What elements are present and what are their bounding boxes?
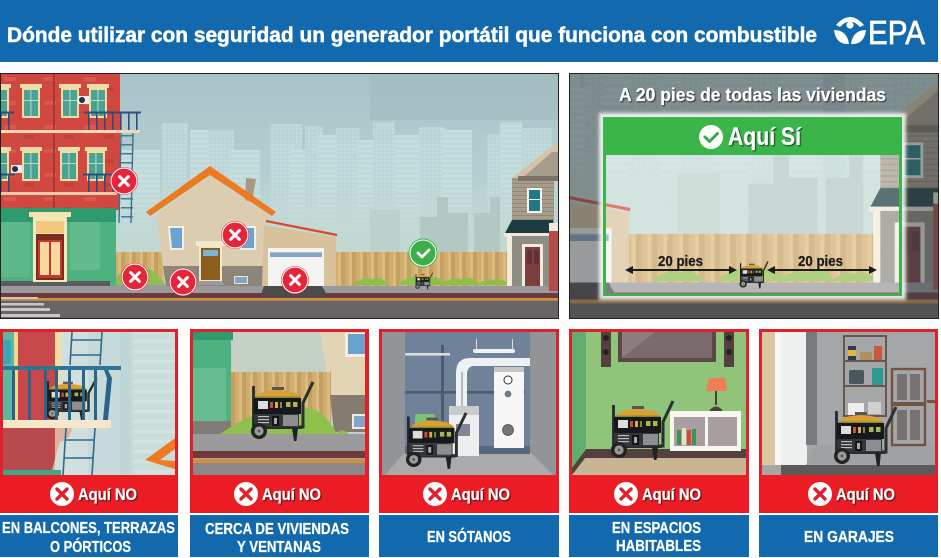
- caption: O PÓRTICOS: [50, 538, 131, 556]
- badge: garage not allowed: [281, 266, 309, 294]
- generator: [834, 407, 896, 466]
- caption: EN BALCONES, TERRAZAS: [2, 520, 175, 537]
- caption: [759, 515, 938, 557]
- clean view inside the frame: [606, 155, 899, 294]
- EPA logo: [834, 14, 925, 51]
- title: Dónde utilizar con seguridad un generador portátil que funciona con combustible: [7, 24, 817, 47]
- verdict bar: Aquí NO: [836, 485, 895, 504]
- generator: [406, 413, 466, 469]
- icon: check: [699, 125, 723, 149]
- verdict bar: Aquí NO: [451, 485, 510, 504]
- label right distance: 20 pies: [798, 254, 843, 270]
- caption: [379, 515, 559, 557]
- generator on balcony: [46, 378, 97, 421]
- caption: Y VENTANAS: [237, 539, 321, 556]
- badge: balcony not allowed: [110, 167, 138, 195]
- badge: near window not allowed: [221, 221, 249, 249]
- caption: EN ESPACIOS: [612, 520, 701, 537]
- verdict bar: Aquí NO: [78, 485, 137, 504]
- caption: EN SÓTANOS: [427, 528, 511, 546]
- panel: garages: [759, 329, 939, 557]
- badge: safe location: [408, 238, 438, 268]
- panel: living spaces: [569, 329, 749, 557]
- verdict bar: [190, 475, 369, 513]
- header banner: [0, 0, 938, 62]
- verdict bar: [379, 475, 559, 513]
- badge: near fence not allowed: [121, 263, 149, 291]
- verdict bar: Aquí NO: [642, 485, 701, 504]
- panel: basements: [379, 329, 559, 557]
- panel: near homes and windows: [190, 329, 370, 557]
- generator: [251, 382, 313, 441]
- caption: EN GARAJES: [804, 529, 894, 546]
- generator in safe location: [415, 273, 433, 289]
- generator: [611, 401, 673, 460]
- caption: HABITABLES: [616, 538, 701, 555]
- verdict bar: Aquí NO: [262, 485, 321, 504]
- generator: [739, 261, 768, 289]
- badge: near house not allowed: [169, 268, 197, 296]
- arrow left: [625, 266, 737, 274]
- caption: CERCA DE VIVIENDAS: [205, 521, 349, 538]
- heading: 20 feet from homes: A 20 pies de todas las viviendas: [619, 84, 886, 105]
- caption: [0, 515, 178, 557]
- panel: 20 feet detail: [569, 73, 939, 319]
- verdict bar: [759, 475, 938, 513]
- panel: balconies: [0, 329, 180, 557]
- heading: aqui si: Aquí Sí: [728, 123, 802, 151]
- green frame: [603, 117, 902, 296]
- arrow right: [767, 266, 877, 274]
- white glow: [603, 117, 902, 296]
- verdict bar: [569, 475, 749, 513]
- caption: [190, 515, 369, 557]
- label left distance: 20 pies: [658, 254, 703, 270]
- verdict bar: [0, 475, 178, 513]
- EPA logo: EPA: [868, 14, 925, 51]
- caption: [569, 515, 749, 557]
- panel: street scene: [0, 73, 559, 319]
